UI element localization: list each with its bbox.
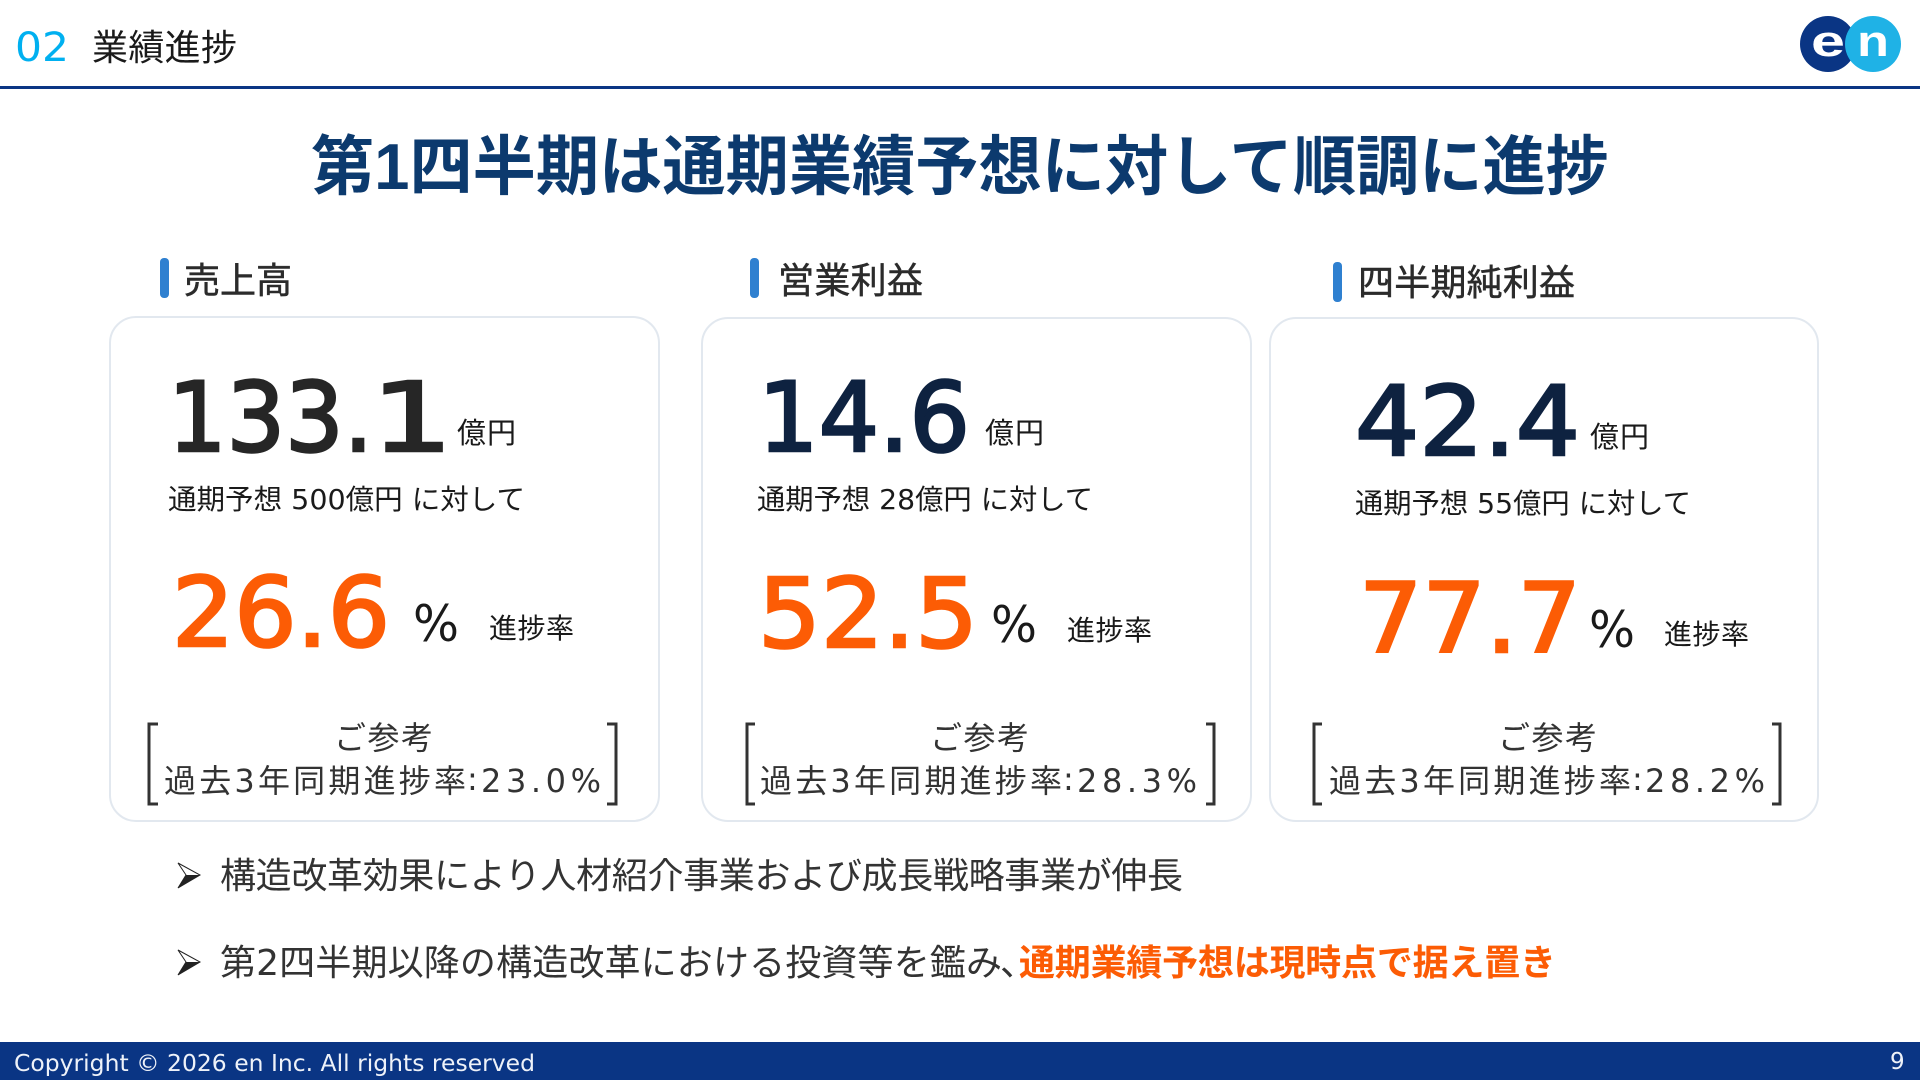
operating profit reference note: 過去3年同期進捗率: [760, 762, 1062, 800]
net profit full-year forecast: 通期予想 55億円 に対して: [1355, 487, 1691, 520]
footer band: [0, 1042, 1920, 1080]
operating profit progress rate: 52.5: [758, 558, 978, 670]
section title: 業績進捗: [92, 27, 237, 68]
revenue progress rate: 26.6: [172, 557, 390, 669]
revenue reference note: ご参考: [334, 720, 433, 756]
icon: bullet arrow 1: [178, 863, 200, 888]
operating profit reference note: 28.3%: [1077, 762, 1197, 800]
card: operating profit: [702, 318, 1251, 821]
revenue amount: 133.: [168, 362, 373, 474]
operating profit reference note: [747, 720, 1214, 804]
icon: en logo: [1800, 16, 1901, 72]
revenue reference note: [149, 720, 616, 804]
revenue reference note: :: [467, 760, 478, 798]
panel: quarterly net profit: [1270, 262, 1818, 821]
panel: operating profit: [702, 258, 1251, 821]
panel heading: operating profit: 営業利益: [778, 260, 923, 301]
card: quarterly net profit: [1270, 318, 1818, 821]
operating profit percent sign: %: [991, 596, 1037, 654]
net profit progress label: 進捗率: [1664, 619, 1749, 650]
header section: [0, 16, 1920, 89]
operating profit unit: 億円: [985, 417, 1044, 450]
net profit reference note: 28.2%: [1645, 762, 1765, 800]
panel: revenue: [110, 258, 659, 821]
revenue full-year forecast: 通期予想 500億円 に対して: [168, 483, 525, 516]
net profit reference note: 過去3年同期進捗率: [1329, 762, 1631, 800]
operating profit amount: 14.6: [758, 362, 970, 474]
revenue reference note: 過去3年同期進捗率: [164, 762, 466, 800]
copyright: Copyright © 2026 en Inc. All rights reserved: [14, 1051, 535, 1077]
net profit amount: 42.4: [1355, 366, 1580, 478]
icon: en logo: e: [1811, 17, 1845, 66]
icon: en logo: n: [1857, 17, 1889, 66]
operating profit progress label: 進捗率: [1067, 615, 1152, 646]
net profit reference note: ご参考: [1498, 720, 1597, 756]
card: revenue: [110, 317, 659, 821]
section number: 02: [15, 25, 69, 71]
bullet list: [178, 855, 1556, 984]
bullet 2 text: 第2四半期以降の構造改革における投資等を鑑み: [220, 943, 1002, 984]
revenue reference note: 23.0%: [481, 762, 601, 800]
bullet 2 highlighted text: 通期業績予想は現時点で据え置き: [1019, 942, 1556, 983]
net profit reference note: [1314, 720, 1780, 804]
revenue unit: 億円: [457, 417, 516, 450]
operating profit reference note: ご参考: [930, 720, 1029, 756]
panel heading: revenue: 売上高: [184, 260, 292, 301]
net profit progress rate: 77.7: [1359, 563, 1581, 675]
main title: 第1四半期は通期業績予想に対して順調に進捗: [311, 130, 1609, 203]
operating profit reference note: :: [1063, 760, 1074, 798]
icon: bullet arrow 2: [178, 950, 200, 975]
page number: 9: [1890, 1049, 1905, 1075]
operating profit full-year forecast: 通期予想 28億円 に対して: [757, 483, 1093, 516]
revenue progress label: 進捗率: [489, 613, 574, 644]
bullet 2 text: 、: [1000, 942, 1036, 983]
bullet 1 text: 構造改革効果により人材紹介事業および成長戦略事業が伸長: [220, 855, 1183, 896]
revenue percent sign: %: [413, 595, 459, 653]
net profit unit: 億円: [1590, 421, 1649, 454]
revenue amount: 1: [371, 362, 453, 474]
net profit reference note: :: [1632, 760, 1643, 798]
panel heading: quarterly net profit: 四半期純利益: [1358, 262, 1575, 303]
net profit percent sign: %: [1589, 601, 1635, 659]
